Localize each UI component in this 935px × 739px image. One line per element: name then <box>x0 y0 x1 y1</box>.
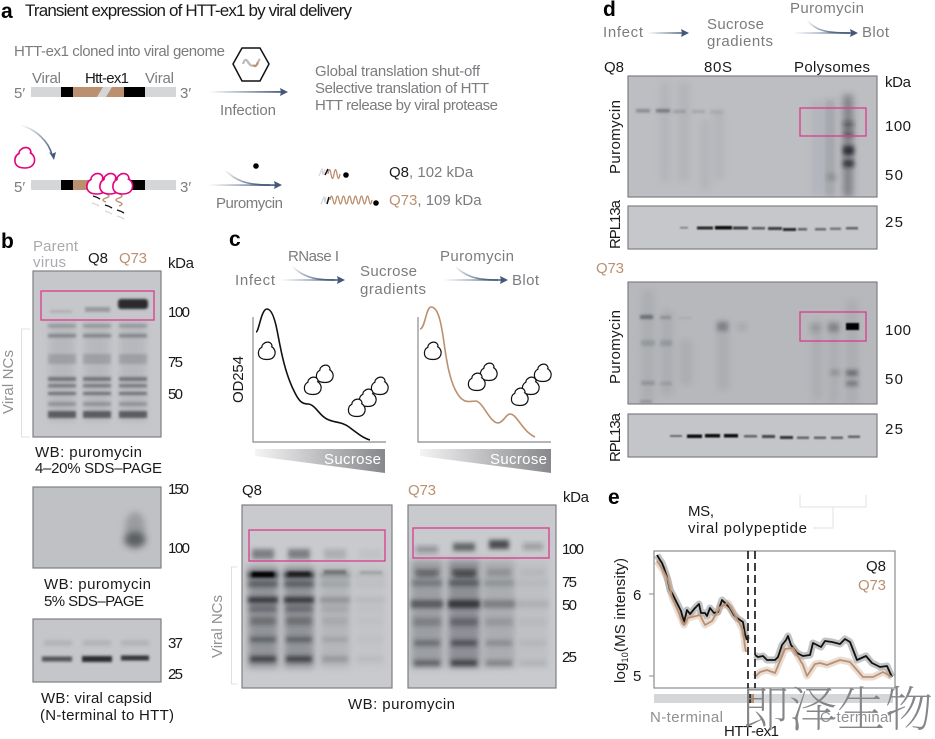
size markers c <box>562 541 584 666</box>
icon: free ribosome <box>15 148 35 168</box>
size markers blot 3 <box>168 635 183 683</box>
header labels Q8: 80S <box>704 59 732 76</box>
line chart: log10 MS intensity: Q8 <box>866 558 886 575</box>
header labels Q8: kDa <box>885 74 912 91</box>
size markers c: 25 <box>562 649 577 666</box>
blot labels c: kDa <box>563 489 590 506</box>
blot labels c: Q73 <box>408 482 436 499</box>
y-axis label OD254: OD254 <box>230 356 247 403</box>
construct: HTT-ex1 in viral genome: Htt-ex1 <box>85 70 129 87</box>
size markers d Q73 <box>885 322 911 388</box>
size markers blot 1 <box>168 304 190 403</box>
label: RPL13a Q8: RPL13a <box>607 199 624 249</box>
construct with translating ribosomes: 3′ <box>180 179 191 196</box>
size markers d Q73: 50 <box>885 371 903 388</box>
size markers blot 2: 150 <box>168 481 189 498</box>
blot: viral capsid <box>33 619 161 682</box>
label: Puromycin Q8: Puromycin <box>607 100 624 174</box>
workflow c: Infect <box>235 272 276 289</box>
icon: puromycin dot <box>253 163 259 169</box>
icon: virus hexagon <box>233 48 269 81</box>
sucrose wedge Q73 <box>420 449 551 473</box>
puromycin label: Puromycin <box>216 195 283 212</box>
panel c: RNase footprinting gradients <box>209 228 590 713</box>
construct: HTT-ex1 in viral genome: 3′ <box>180 85 191 102</box>
size markers blot 1: 100 <box>168 304 190 321</box>
workflow c <box>235 248 540 298</box>
infection outcomes list: Global translation shut-off <box>315 63 481 80</box>
blot: puromycin 4–20% <box>33 271 161 437</box>
infection outcomes list: Selective translation of HTT <box>315 80 489 97</box>
size markers c: 75 <box>562 574 577 591</box>
workflow c: Blot <box>512 272 540 289</box>
panel letter e: e <box>608 486 620 509</box>
sucrose wedge Q8: Sucrose <box>324 451 381 468</box>
arrow: curved ribosome loading <box>20 125 56 160</box>
panel e: MS intensity along viral polypeptide <box>608 486 895 739</box>
y-axis label: (MS intensity) <box>612 558 629 652</box>
construct: HTT-ex1 in viral genome <box>14 70 191 102</box>
caption blot 1: WB: puromycin <box>35 444 142 461</box>
blot: Q73 RPL13a <box>628 414 877 457</box>
workflow c: gradients <box>360 281 426 298</box>
caption blot 3: (N-terminal to HTT) <box>40 707 174 724</box>
size markers blot 2 <box>168 481 190 557</box>
size markers d Q73: 100 <box>885 322 911 339</box>
header labels Q8: Polysomes <box>794 59 870 76</box>
marker 25 Q73: 25 <box>885 421 903 438</box>
heading e: viral polypeptide <box>688 520 807 537</box>
label: viral NCs: Viral NCs <box>0 350 17 414</box>
size markers blot 1: 75 <box>168 354 183 371</box>
construct: HTT-ex1 in viral genome: Viral <box>32 70 61 87</box>
heading e: MS, <box>688 503 714 520</box>
heading a: Transient expression of HTT-ex1 by viral delivery <box>25 1 352 20</box>
workflow d: Blot <box>862 24 890 41</box>
size markers d Q8: 50 <box>885 167 903 184</box>
infection outcomes list <box>315 63 498 114</box>
blot: puromycin 5% <box>33 487 161 568</box>
lane labels b: virus <box>33 254 66 271</box>
arrow: puromycin addition <box>208 170 282 189</box>
caption blot 2 <box>44 576 151 610</box>
line chart: log10 MS intensity: Q73 <box>858 577 886 594</box>
workflow d: Infect <box>603 24 644 41</box>
chart: Q73 OD254 profile <box>418 307 551 442</box>
workflow c: Sucrose <box>360 263 417 280</box>
workflow d <box>603 0 890 50</box>
size markers blot 3: 25 <box>168 666 183 683</box>
header labels Q8 <box>604 59 912 91</box>
construct: HTT-ex1 in viral genome: 5′ <box>14 85 25 102</box>
caption blot 2: WB: puromycin <box>44 576 151 593</box>
panel letter c: c <box>229 228 241 251</box>
nascent chain Q8: Q8, 102 kDa <box>389 164 474 181</box>
lane labels b: kDa <box>168 255 195 272</box>
size markers c: 100 <box>562 541 584 558</box>
blot labels c: Q8 <box>242 482 262 499</box>
genome caption: HTT-ex1 cloned into viral genome <box>14 43 225 60</box>
workflow c: RNase I <box>288 248 339 265</box>
workflow d: Puromycin <box>790 0 864 17</box>
nascent chain Q8 <box>319 164 474 181</box>
caption blot 3 <box>40 690 174 724</box>
caption c: WB: puromycin <box>348 696 455 713</box>
size markers blot 3: 37 <box>168 635 183 652</box>
bracket: polysome fractions <box>800 495 866 528</box>
polypeptide bar <box>654 694 893 703</box>
size markers d Q8 <box>885 118 911 184</box>
label c: viral NCs: Viral NCs <box>209 595 226 658</box>
nascent chain Q73: Q73, 109 kDa <box>389 192 482 209</box>
label: RPL13a Q73: RPL13a <box>607 412 624 462</box>
panel letter a: a <box>1 0 13 23</box>
size markers blot 2: 100 <box>168 540 190 557</box>
caption blot 1 <box>35 444 162 477</box>
panel b: western blots of parent, Q8, Q73 <box>0 230 195 724</box>
lane labels b: Parent <box>33 238 79 255</box>
sucrose wedge Q73: Sucrose <box>490 451 547 468</box>
workflow d: gradients <box>707 33 773 50</box>
marker 25 Q8: 25 <box>885 214 903 231</box>
blot: Q8 gradient fractions <box>242 505 392 688</box>
construct with translating ribosomes: 5′ <box>14 179 25 196</box>
label: Puromycin Q73: Puromycin <box>607 310 624 384</box>
lane labels b: Q73 <box>119 250 147 267</box>
workflow d: Sucrose <box>707 16 764 33</box>
caption blot 1: 4–20% SDS–PAGE <box>35 460 162 477</box>
header labels Q8: Q8 <box>604 59 624 76</box>
size markers blot 1: 50 <box>168 386 183 403</box>
label Q73: Q73 <box>596 260 624 277</box>
blot: Q73 puromycin <box>628 282 877 404</box>
y tick labels: 6 <box>633 587 641 604</box>
caption blot 3: WB: viral capsid <box>41 690 152 707</box>
panel letter b: b <box>1 230 14 253</box>
size markers c: 50 <box>562 597 577 614</box>
construct with translating ribosomes <box>14 174 191 219</box>
lane labels b <box>33 238 195 272</box>
chart: Q8 OD254 profile <box>253 309 388 442</box>
infection label: Infection <box>220 102 276 119</box>
heading e <box>688 503 807 537</box>
blot: Q8 puromycin <box>628 76 877 197</box>
y-axis label: log <box>612 663 629 683</box>
y tick labels <box>633 587 641 685</box>
sucrose wedge Q8 <box>255 449 385 473</box>
arrow: infection <box>208 88 288 96</box>
y-axis label: 10 <box>620 652 630 662</box>
label N-terminal: N-terminal <box>650 709 723 726</box>
construct: HTT-ex1 in viral genome: Viral <box>145 70 174 87</box>
nascent chain Q73 <box>321 192 482 209</box>
infection outcomes list: HTT release by viral protease <box>315 97 498 114</box>
blot: Q73 gradient fractions <box>408 505 556 688</box>
caption blot 2: 5% SDS–PAGE <box>44 593 144 610</box>
line chart: log10 MS intensity <box>649 551 895 688</box>
blot labels c <box>242 482 590 506</box>
label C-terminal: C-terminal <box>820 709 892 726</box>
workflow c: Puromycin <box>440 248 514 265</box>
panel d: polysome profiling blots <box>596 0 912 462</box>
watermark: 即泽生物 <box>741 671 933 739</box>
size markers d Q8: 100 <box>885 118 911 135</box>
bracket c: viral NCs <box>232 567 237 684</box>
lane labels b: Q8 <box>88 250 108 267</box>
blot: Q8 RPL13a <box>628 206 877 249</box>
y tick labels: 5 <box>633 668 641 685</box>
bracket: viral NCs <box>22 329 30 437</box>
panel a: viral delivery schematic <box>1 0 498 219</box>
